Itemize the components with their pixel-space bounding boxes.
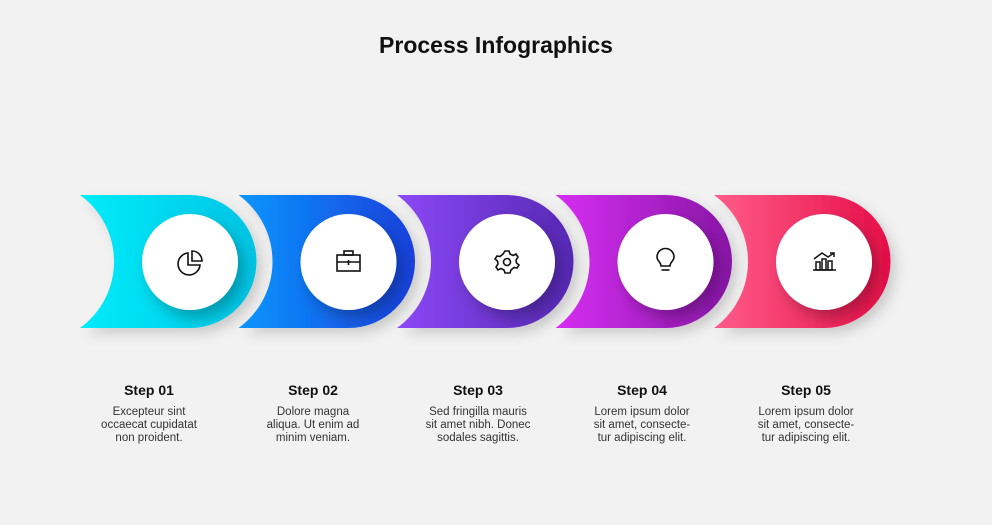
step 1 text: Excepteur sint [113, 406, 185, 418]
step 1 text: occaecat cupidatat [101, 419, 197, 431]
step 4 text: Lorem ipsum dolor [594, 406, 690, 418]
step 5 text [758, 382, 854, 444]
icon: briefcase [337, 251, 360, 271]
step 5 text: Step 05 [781, 382, 831, 398]
step 2 text: minim veniam. [276, 432, 350, 444]
step 2 text: aliqua. Ut enim ad [267, 419, 359, 431]
step 2 text: Dolore magna [277, 406, 349, 418]
segment 1 [80, 195, 256, 328]
step 1 text [101, 382, 197, 444]
icon: light bulb [657, 248, 674, 270]
step 2 text [267, 382, 359, 444]
step 4 text: Step 04 [617, 382, 667, 398]
step 4 text: tur adipiscing elit. [598, 432, 686, 444]
step 4 text [594, 382, 690, 444]
step 2 text: Step 02 [288, 382, 338, 398]
step 3 text: Step 03 [453, 382, 503, 398]
step 1 text: Step 01 [124, 382, 174, 398]
segment 5 [714, 195, 890, 328]
segment 2 [238, 195, 415, 328]
icon: growth chart [813, 253, 836, 270]
step 3 text [426, 382, 530, 444]
icon: pie chart [178, 251, 202, 275]
step 3 text: Sed fringilla mauris [429, 406, 527, 418]
step 3 text: sit amet nibh. Donec [426, 419, 530, 431]
step 5 text: Lorem ipsum dolor [758, 406, 854, 418]
step 5 text: tur adipiscing elit. [762, 432, 850, 444]
icon: gear [495, 251, 519, 273]
segment 4 [556, 195, 732, 328]
step 1 text: non proident. [115, 432, 183, 444]
step 5 text: sit amet, consecte- [758, 419, 854, 431]
step 3 text: sodales sagittis. [437, 432, 519, 444]
step 4 text: sit amet, consecte- [594, 419, 690, 431]
segment 3 [397, 195, 573, 328]
title: Process Infographics [379, 32, 613, 58]
